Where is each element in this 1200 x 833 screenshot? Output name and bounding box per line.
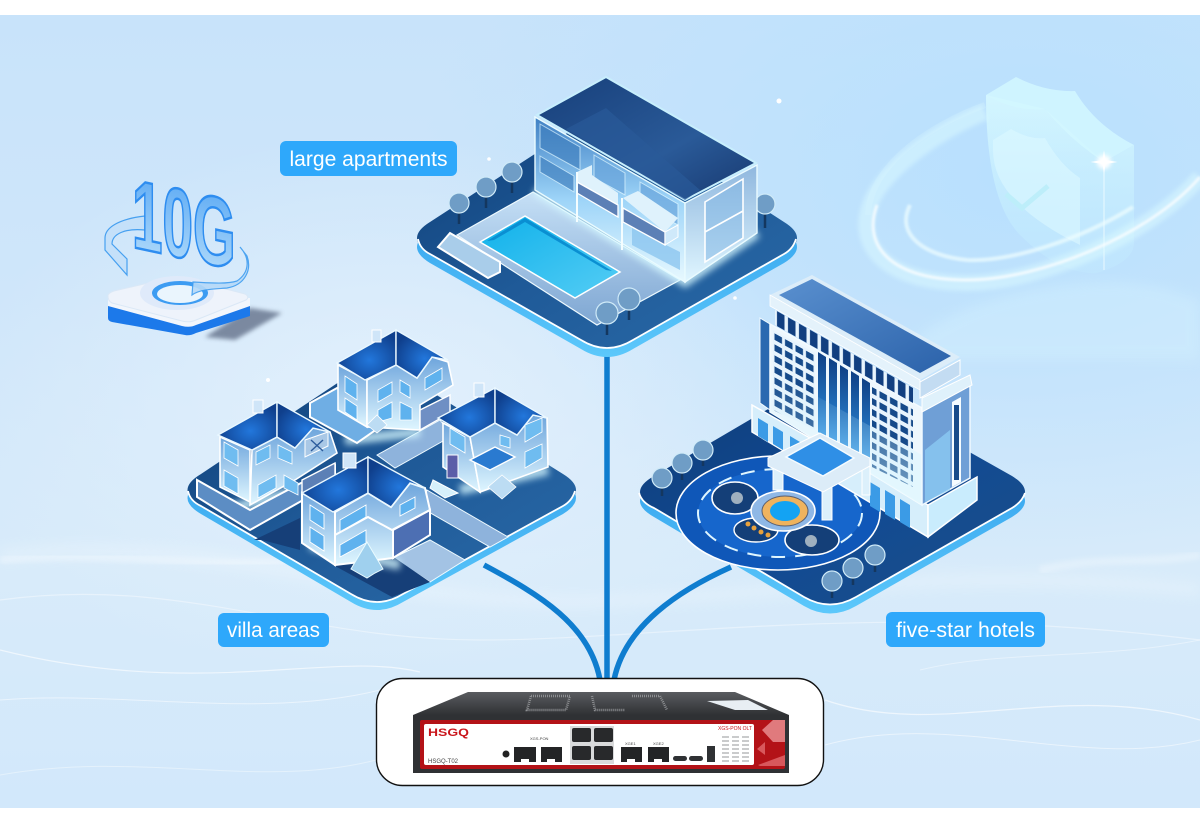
label: large apartments: large apartments	[290, 148, 448, 171]
icon: translucent shield with swirl	[866, 77, 1200, 360]
reset	[502, 750, 510, 758]
podium	[752, 405, 928, 537]
model: HSGQ-T02	[428, 759, 459, 765]
tower right windows	[872, 387, 913, 487]
pool	[480, 216, 620, 298]
right cable	[614, 567, 731, 680]
driveway	[676, 456, 880, 570]
panel: apartment platform	[417, 77, 797, 357]
right villa	[430, 383, 548, 499]
glow under building	[535, 190, 757, 282]
side graphics	[762, 720, 785, 742]
device top	[413, 692, 789, 715]
tower centre stripes	[818, 352, 870, 462]
platform slab	[417, 125, 797, 357]
roads	[377, 420, 452, 468]
panel: OLT device card: XGS-PON	[530, 736, 549, 741]
label: five-star hotels: five-star hotels	[896, 619, 1035, 642]
label: five-star hotels	[886, 612, 1045, 647]
label: large apartments	[280, 141, 457, 176]
10G lettering: 10G	[132, 159, 236, 290]
entrance canopy	[773, 460, 870, 520]
building walls	[535, 117, 685, 282]
background light waves	[0, 551, 1200, 775]
platform slab	[640, 389, 1025, 614]
tower left edge	[760, 318, 770, 410]
shadow	[205, 308, 282, 340]
left villa	[197, 400, 337, 530]
indicator labels	[722, 737, 750, 761]
glow under villas	[225, 432, 548, 565]
courtyard	[457, 192, 680, 325]
tower side wall	[922, 385, 970, 505]
bench	[438, 233, 500, 278]
product name: XGS-PON OLT	[718, 726, 753, 732]
left cable	[484, 565, 600, 680]
fountain	[762, 496, 808, 526]
trees	[449, 162, 775, 335]
RJ45 ports	[570, 726, 614, 764]
sparkle dots	[266, 98, 782, 382]
cables	[484, 350, 731, 680]
platform slab	[188, 374, 576, 610]
panel: OLT device card: XGE1	[625, 741, 636, 746]
device front	[413, 715, 789, 773]
icon: 10G hub	[105, 159, 282, 340]
console ports	[673, 756, 687, 761]
tower base glow	[770, 370, 922, 505]
tower facade	[770, 324, 922, 505]
roof	[537, 77, 756, 200]
windows	[705, 179, 743, 262]
ribbon back	[105, 216, 145, 275]
panel: villa platform	[188, 330, 576, 610]
label: villa areas: villa areas	[227, 619, 320, 642]
tower left windows	[773, 330, 815, 430]
ribbon front	[192, 247, 249, 295]
brand: HSGQ	[428, 727, 470, 739]
tower top windows	[775, 310, 913, 403]
balconies	[577, 165, 618, 217]
panel: hotel platform	[639, 275, 1025, 614]
panel: OLT device card	[376, 678, 824, 786]
label: villa areas	[218, 613, 329, 647]
device base	[108, 300, 250, 335]
hotel roof	[770, 275, 960, 380]
front villa	[302, 453, 430, 578]
panel: OLT device card: XGE2	[653, 741, 664, 746]
center cable	[604, 350, 610, 680]
trees	[652, 440, 885, 598]
back villa	[310, 330, 453, 443]
SFP ports	[514, 747, 669, 762]
